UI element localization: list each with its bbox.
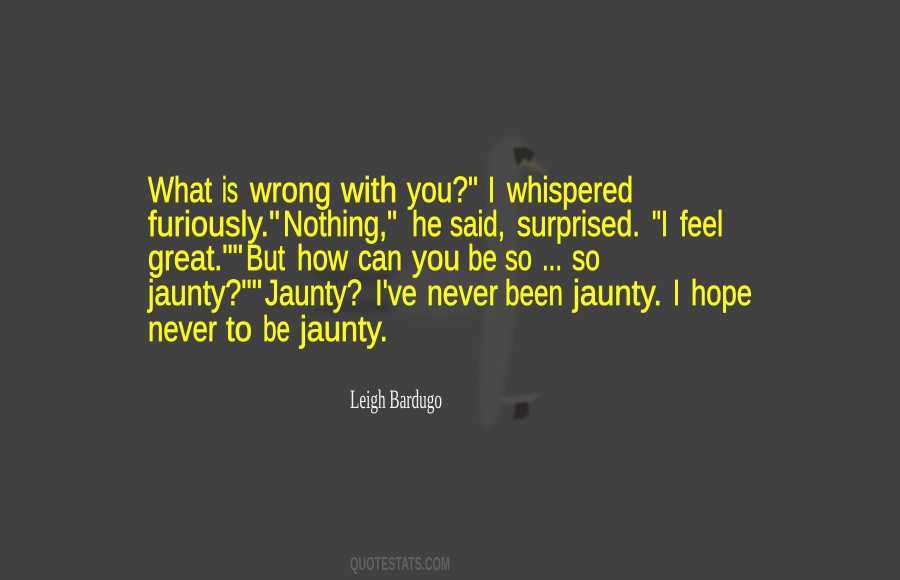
quote line 3: [148, 237, 600, 278]
quote line 4: jaunty?"": [147, 272, 262, 313]
quote line 4: hope: [691, 272, 752, 313]
quote line 1: with: [340, 169, 397, 210]
quote line 3: great."": [148, 237, 243, 278]
watermark: QUOTESTATS.COM: [350, 554, 450, 574]
quote line 5: to: [226, 308, 252, 349]
quote line 4: [147, 272, 752, 313]
quote line 1: [148, 169, 633, 210]
quote line 4: I: [673, 272, 680, 313]
quote line 1: What: [148, 169, 212, 210]
faint wing shadows: [307, 270, 397, 313]
quote line 2: "I: [652, 203, 668, 244]
swan neck and head: [479, 137, 534, 428]
quote line 3: so: [572, 237, 600, 278]
quote line 5: never: [148, 308, 217, 349]
quote line 5: be: [263, 308, 290, 349]
quote line 4: I've: [375, 272, 417, 313]
quote line 3: can: [358, 237, 402, 278]
quote line 4: Jaunty?: [265, 272, 362, 313]
quote line 4: been: [505, 272, 563, 313]
quote line 2: furiously.": [148, 203, 280, 244]
quote line 3: ...: [542, 237, 562, 278]
quote line 3: be: [468, 237, 497, 278]
quote line 2: [148, 203, 723, 244]
quote line 1: I: [488, 169, 495, 210]
quote line 4: never: [427, 272, 498, 313]
swan beak: [520, 153, 549, 175]
quote text: [147, 169, 752, 349]
quote line 3: how: [297, 237, 349, 278]
quote line 1: is: [222, 169, 238, 210]
quote line 2: feel: [680, 203, 723, 244]
quote line 5: [148, 308, 388, 349]
quote line 2: he: [412, 203, 442, 244]
swan eye mask: [513, 147, 535, 166]
author name: Leigh Bardugo: [350, 385, 442, 414]
quote line 2: surprised.: [517, 203, 640, 244]
quote line 1: you?": [407, 169, 478, 210]
quote line 5: jaunty.: [299, 308, 388, 349]
quote line 3: you: [412, 237, 460, 278]
quote line 1: whispered: [506, 169, 633, 210]
quote line 2: said,: [450, 203, 505, 244]
quote line 3: so: [505, 237, 532, 278]
quote line 3: But: [246, 237, 285, 278]
quote line 2: Nothing,": [283, 203, 397, 244]
icon: faint swan photo: [307, 137, 549, 428]
quote line 1: wrong: [249, 169, 331, 210]
quote line 4: jaunty.: [572, 272, 662, 313]
reflected beak: [498, 393, 543, 404]
